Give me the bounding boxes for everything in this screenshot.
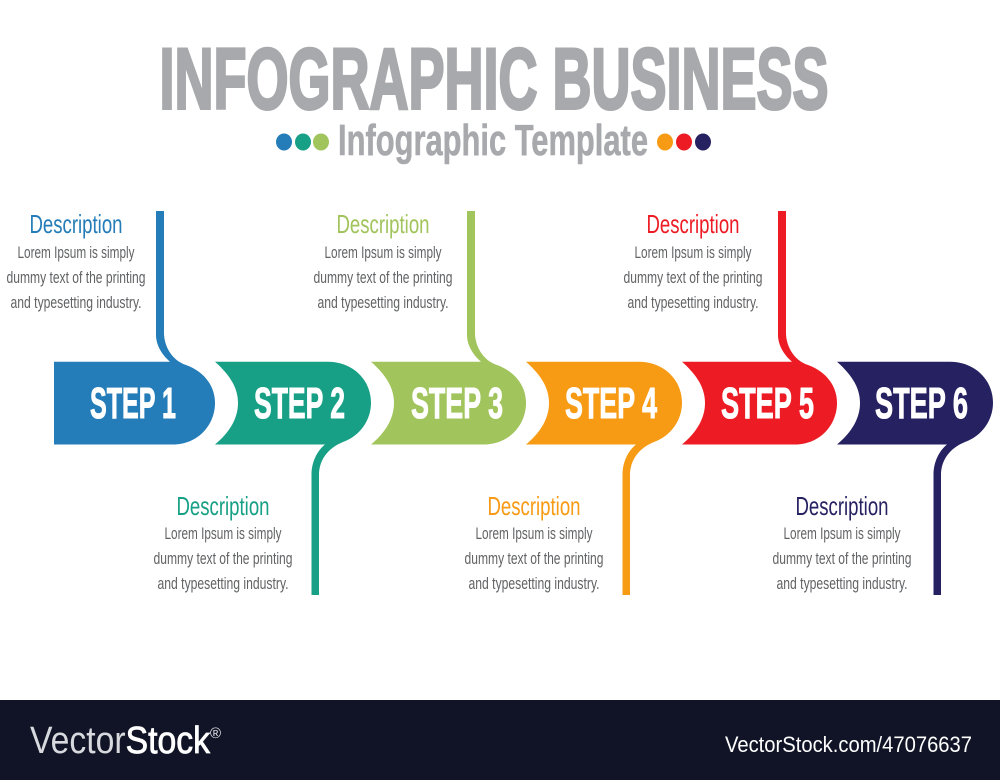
description 6: Description bbox=[796, 491, 888, 521]
description 1: Description bbox=[30, 209, 122, 239]
step 5: STEP 5 bbox=[721, 379, 814, 428]
description 2: Lorem Ipsum is simply bbox=[164, 524, 282, 543]
footer logo: VectorStock bbox=[30, 720, 211, 762]
left colour dots bbox=[276, 134, 329, 150]
description 4: dummy text of the printing bbox=[464, 549, 604, 568]
description 2: and typesetting industry. bbox=[158, 574, 288, 593]
description 2 bbox=[154, 491, 292, 593]
description 5: dummy text of the printing bbox=[624, 268, 762, 287]
description 4: and typesetting industry. bbox=[468, 574, 600, 593]
step 1 bbox=[54, 211, 215, 444]
description 3 bbox=[314, 209, 452, 312]
step 2: STEP 2 bbox=[254, 379, 345, 428]
description 5: and typesetting industry. bbox=[628, 293, 758, 312]
footer url: VectorStock.com/47076637 bbox=[725, 732, 972, 757]
description 1: and typesetting industry. bbox=[10, 293, 142, 312]
step 2 bbox=[215, 362, 371, 595]
description 3: and typesetting industry. bbox=[318, 293, 448, 312]
description 4 bbox=[464, 491, 604, 593]
description 6: and typesetting industry. bbox=[776, 574, 908, 593]
description 3: Description bbox=[336, 209, 430, 239]
step 3: STEP 3 bbox=[411, 379, 503, 428]
step 4 bbox=[526, 362, 682, 595]
description 6 bbox=[772, 491, 912, 593]
step 1: STEP 1 bbox=[90, 379, 176, 428]
description 6: dummy text of the printing bbox=[772, 549, 912, 568]
step 6 bbox=[837, 362, 993, 595]
footer bar bbox=[0, 700, 1000, 780]
step 5 bbox=[682, 211, 837, 444]
step 4: STEP 4 bbox=[565, 379, 657, 428]
description 4: Lorem Ipsum is simply bbox=[476, 524, 593, 543]
description 2: Description bbox=[176, 491, 270, 521]
footer logo: ® bbox=[210, 725, 221, 742]
description 2: dummy text of the printing bbox=[154, 549, 292, 568]
right colour dots bbox=[657, 134, 711, 150]
description 1 bbox=[6, 209, 146, 312]
description 3: Lorem Ipsum is simply bbox=[324, 243, 442, 262]
description 1: Lorem Ipsum is simply bbox=[18, 243, 135, 262]
description 3: dummy text of the printing bbox=[314, 268, 452, 287]
description 6: Lorem Ipsum is simply bbox=[784, 524, 901, 543]
description 1: dummy text of the printing bbox=[6, 268, 146, 287]
description 4: Description bbox=[488, 491, 580, 521]
description 5: Lorem Ipsum is simply bbox=[634, 243, 752, 262]
description 5: Description bbox=[646, 209, 740, 239]
description 5 bbox=[624, 209, 762, 312]
step 3 bbox=[371, 211, 526, 444]
subtitle: Infographic Template bbox=[338, 116, 648, 165]
